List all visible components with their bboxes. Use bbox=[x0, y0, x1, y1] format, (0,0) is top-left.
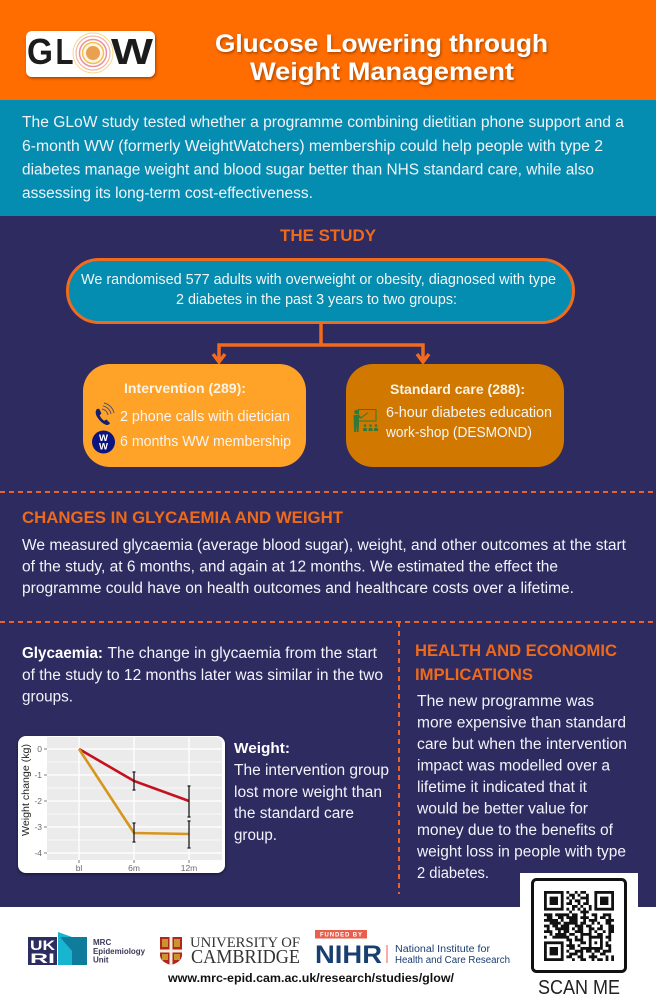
title: Weight Management bbox=[250, 58, 515, 86]
panel: study introduction: 6-month WW (formerly WeightWatchers) membership could help people with type 2 bbox=[22, 138, 603, 155]
x axis labels bbox=[76, 863, 197, 873]
icon: WW badge: W bbox=[99, 433, 108, 444]
logo: UKRI MRC Epidemiology Unit: RI bbox=[30, 950, 55, 966]
panel: randomisation pill: We randomised 577 adults with overweight or obesity, diagnosed with type bbox=[81, 272, 556, 288]
logo: University of Cambridge: CAMBRIDGE bbox=[191, 947, 300, 968]
panel: randomisation pill: 2 diabetes in the past 3 years to two groups: bbox=[176, 292, 457, 308]
text block: health and economic implications: 2 diabetes. bbox=[417, 865, 489, 882]
panel: study introduction: assessing its long-term cost-effectiveness. bbox=[22, 185, 313, 202]
icon: phone bbox=[96, 403, 114, 425]
x axis labels: bl bbox=[76, 863, 82, 873]
y axis labels: -4 bbox=[34, 848, 42, 858]
y axis labels: -1 bbox=[34, 770, 42, 780]
text block: measurements: of the study, at 6 months, and again at 12 months. We estimated the effect the bbox=[22, 558, 558, 576]
heading: health and economic implications bbox=[415, 641, 617, 684]
error bars bbox=[132, 772, 190, 848]
panel: intervention group bbox=[83, 364, 306, 467]
panel: standard care group: work-shop (DESMOND) bbox=[385, 425, 532, 441]
panel: study introduction bbox=[0, 100, 656, 216]
text block: measurements: We measured glycaemia (average blood sugar), weight, and other outcomes at the start bbox=[22, 537, 627, 554]
y axis title: Weight change (kg) bbox=[20, 744, 32, 836]
icon: WW badge: W bbox=[99, 442, 108, 452]
text block: health and economic implications: weight loss in people with type bbox=[416, 844, 626, 860]
text block: health and economic implications: more expensive than standard bbox=[417, 714, 626, 732]
logo: UKRI MRC Epidemiology Unit bbox=[28, 932, 146, 966]
y axis labels: 0 bbox=[37, 744, 42, 754]
y axis labels: -2 bbox=[34, 796, 42, 806]
QR code panel bbox=[520, 873, 638, 1000]
text block: weight result: The intervention group bbox=[234, 762, 389, 779]
logo: UKRI MRC Epidemiology Unit: MRC bbox=[93, 938, 111, 947]
title bbox=[215, 30, 548, 86]
panel: study introduction: The GLoW study tested whether a programme combining dietitian phone support and a bbox=[22, 114, 624, 131]
series: standard care bbox=[79, 749, 189, 801]
icon: WW badge bbox=[92, 430, 115, 454]
text block: health and economic implications: would be better value for bbox=[416, 800, 588, 818]
panel: standard care group: Standard care (288): bbox=[390, 381, 525, 397]
logo: funded by NIHR: FUNDED BY bbox=[320, 932, 362, 938]
text block: weight result: lost more weight than bbox=[234, 784, 382, 801]
logo: GLoW: L bbox=[56, 31, 74, 72]
panel: intervention group: 2 phone calls with dietician bbox=[120, 409, 290, 425]
text block: health and economic implications: impact was modelled over a bbox=[417, 758, 610, 774]
logo: GLoW bbox=[26, 31, 155, 77]
icon: QR code bbox=[544, 891, 614, 961]
panel: standard care group bbox=[346, 364, 564, 467]
logo: funded by NIHR bbox=[315, 930, 510, 969]
logo: University of Cambridge bbox=[160, 935, 300, 968]
logo: UKRI MRC Epidemiology Unit: UK bbox=[30, 937, 55, 953]
text block: health and economic implications: The new programme was bbox=[417, 693, 594, 710]
text block: glycaemia result: groups. bbox=[22, 688, 73, 706]
text block: glycaemia result bbox=[22, 645, 383, 706]
text block: health and economic implications: care but when the intervention bbox=[417, 736, 627, 753]
panel: standard care group: 6-hour diabetes education bbox=[386, 405, 552, 421]
logo: funded by NIHR: NIHR bbox=[315, 941, 382, 969]
title: Glucose Lowering through bbox=[215, 30, 548, 58]
text block: weight result: group. bbox=[234, 827, 277, 844]
text block: health and economic implications bbox=[416, 693, 627, 882]
label: scan me: SCAN ME bbox=[538, 977, 620, 999]
panel: intervention group: Intervention (289): bbox=[124, 380, 246, 396]
website link: www.mrc-epid.cam.ac.uk/research/studies/glow/ bbox=[167, 973, 455, 985]
y axis labels: -3 bbox=[34, 822, 42, 832]
arrows: split into two groups bbox=[213, 323, 429, 362]
logo: UKRI MRC Epidemiology Unit: Epidemiology bbox=[93, 947, 146, 956]
text block: weight result: the standard care bbox=[234, 805, 354, 822]
logo: University of Cambridge: UNIVERSITY OF bbox=[190, 935, 300, 951]
x axis labels: 6m bbox=[128, 863, 140, 873]
panel: randomisation pill bbox=[68, 260, 574, 322]
icon: teacher at board bbox=[354, 410, 378, 432]
logo: UKRI MRC Epidemiology Unit: Unit bbox=[93, 956, 109, 964]
heading: the study: THE STUDY bbox=[280, 226, 377, 245]
text block: glycaemia result: The change in glycaemia from the start bbox=[108, 645, 378, 662]
panel: intervention group: 6 months WW membership bbox=[120, 434, 291, 450]
logo: GLoW: W bbox=[111, 31, 153, 72]
text block: measurements bbox=[22, 537, 627, 597]
heading: changes in glycaemia and weight: CHANGES IN GLYCAEMIA AND WEIGHT bbox=[22, 508, 344, 527]
y axis labels bbox=[34, 744, 42, 858]
heading: health and economic implications: IMPLICATIONS bbox=[415, 665, 533, 684]
text block: glycaemia result: of the study to 12 months later was similar in the two bbox=[22, 667, 383, 684]
text block: health and economic implications: money due to the benefits of bbox=[417, 822, 614, 839]
logo: funded by NIHR: National Institute for bbox=[395, 944, 491, 955]
text block: weight result: Weight: bbox=[234, 740, 290, 757]
text block: weight result bbox=[234, 740, 389, 844]
panel: study introduction: diabetes manage weight and blood sugar better than NHS standard care, while also bbox=[22, 162, 594, 178]
text block: glycaemia result: Glycaemia: bbox=[22, 645, 103, 662]
series: intervention bbox=[79, 749, 189, 834]
panel: header banner bbox=[0, 0, 656, 100]
text block: health and economic implications: lifetime it indicated that it bbox=[417, 779, 588, 796]
logo: funded by NIHR: Health and Care Research bbox=[395, 955, 510, 966]
logo: GLoW: G bbox=[27, 31, 53, 72]
x axis labels: 12m bbox=[181, 863, 197, 873]
heading: health and economic implications: HEALTH AND ECONOMIC bbox=[415, 641, 617, 660]
chart: weight change over time bbox=[18, 736, 225, 873]
text block: measurements: programme could have on health outcomes and healthcare costs over a lifetime. bbox=[22, 580, 574, 597]
